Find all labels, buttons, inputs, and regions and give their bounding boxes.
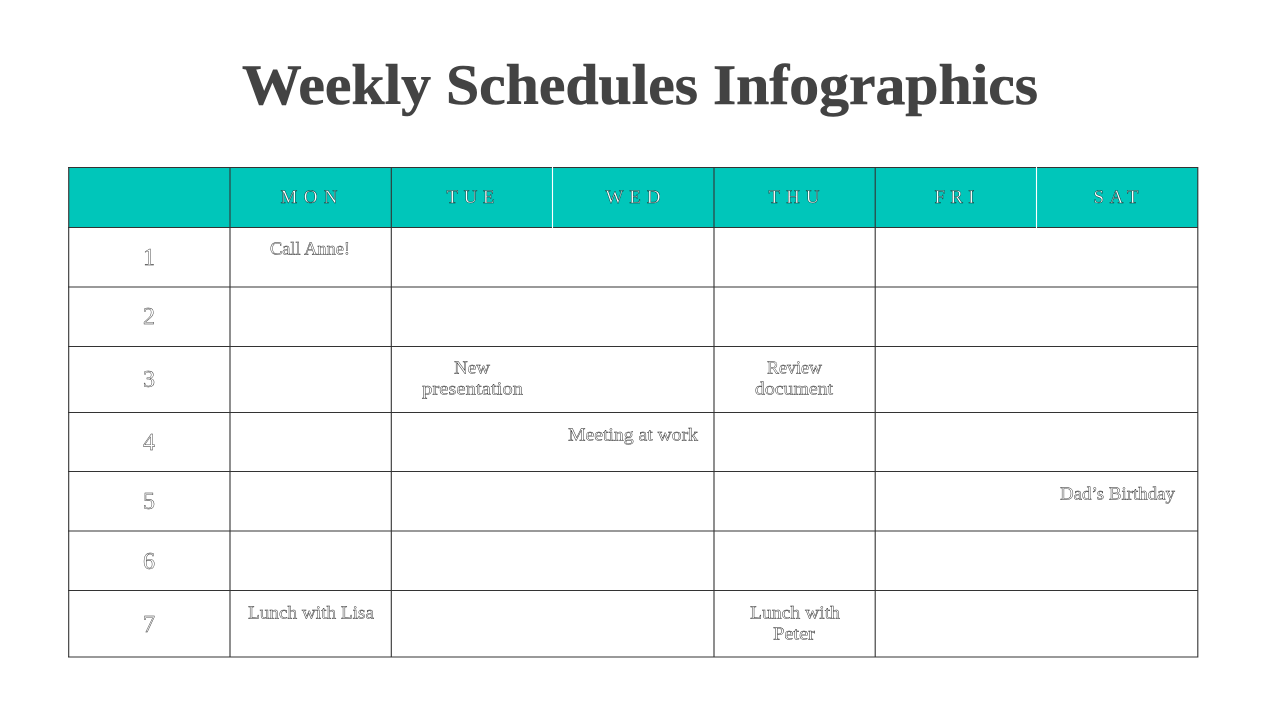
day headers: FRI [934,187,974,208]
title: Weekly Schedules Infographics [242,54,1038,117]
day headers: MON [280,187,338,208]
schedule entries: Peter [773,624,815,644]
schedule entries: document [755,378,833,398]
schedule entries: New [454,358,490,378]
day headers: WED [606,187,660,208]
schedule entries: Dad’s Birthday [1060,484,1175,504]
schedule entries: presentation [422,378,523,398]
schedule entries: Review [767,358,822,378]
row numbers: 7 [143,612,155,638]
row numbers: 6 [143,549,155,575]
row numbers: 2 [143,304,155,330]
schedule entries: Lunch with [750,602,840,622]
header band [68,168,1198,228]
day headers: SAT [1094,187,1139,208]
schedule entries [248,238,1175,644]
row numbers [143,245,155,638]
schedule entries: Meeting at work [568,424,698,444]
day headers: THU [768,187,820,208]
row numbers: 3 [143,367,155,393]
day headers [280,187,1139,208]
row numbers: 5 [143,489,155,515]
row numbers: 4 [143,430,155,456]
row numbers: 1 [143,245,155,271]
day headers: TUE [446,187,494,208]
schedule entries: Lunch with Lisa [248,602,374,622]
schedule table [68,167,1198,658]
schedule entries: Call Anne! [270,238,350,258]
